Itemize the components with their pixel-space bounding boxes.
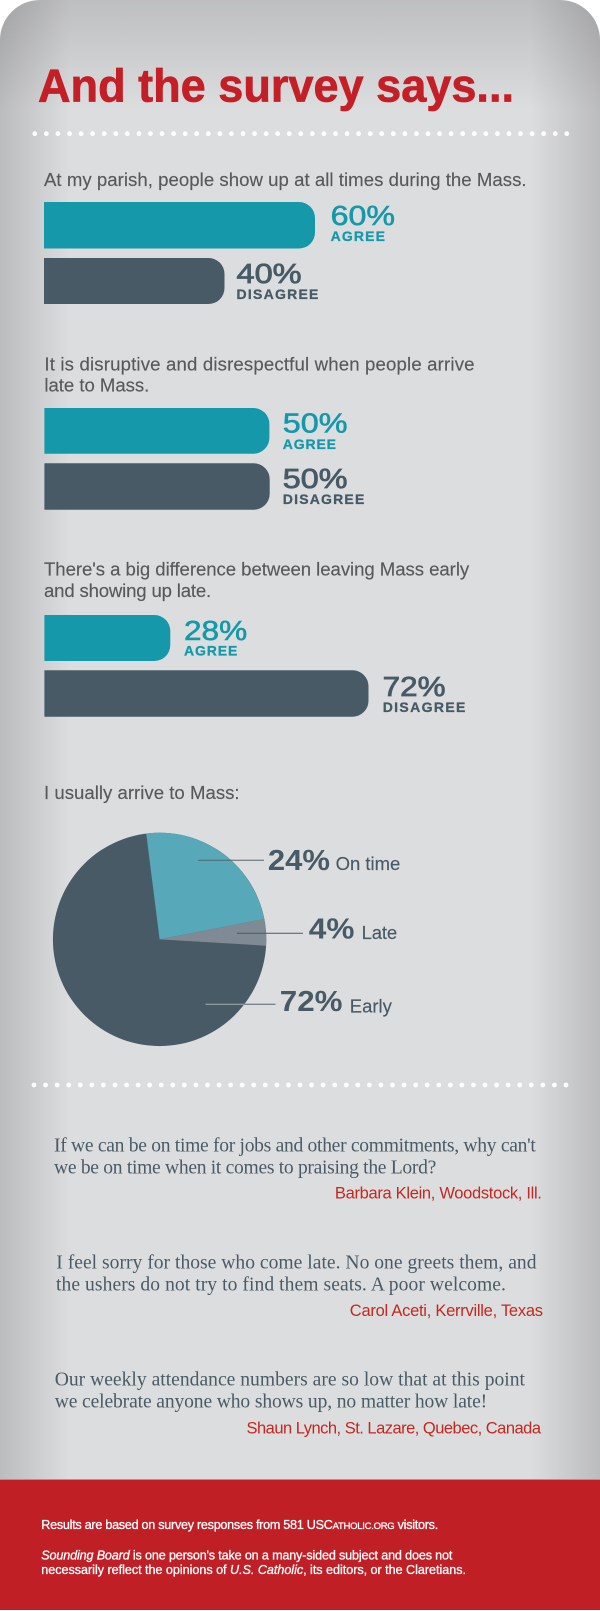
value: 72% disagree: 72% (383, 671, 446, 702)
disclaimer: Sounding Board is one person's take on a many-sided subject and does not (41, 1548, 453, 1562)
callout: 4% late: Late (362, 922, 397, 943)
value: 40% disagree (236, 258, 318, 302)
callout: 4% late: 4% (309, 914, 355, 946)
quote: Carol Aceti (56, 1252, 543, 1320)
quote: Carol Aceti: I feel sorry for those who come late. No one greets them, and (56, 1252, 537, 1273)
bar: disagree 72% (44, 670, 369, 717)
value: 50% agree: AGREE (283, 436, 336, 452)
title: And the survey says... (38, 60, 514, 112)
callout: 24% on time (198, 845, 400, 877)
question text: There's a big difference between leaving Mass early (44, 559, 470, 580)
value: 50% disagree: DISAGREE (283, 491, 364, 507)
survey note: Results are based on survey responses from 581 USCATHOLIC.ORG visitors. (41, 1518, 438, 1532)
value: 50% disagree (283, 463, 364, 507)
bar: agree 60% (44, 202, 315, 248)
callout: 24% on time: 24% (268, 845, 330, 877)
bar: disagree 40% (44, 258, 224, 304)
value: 50% agree (283, 408, 348, 452)
question text (44, 353, 475, 395)
quote: Barbara Klein: we be on time when it comes to praising the Lord? (54, 1157, 436, 1178)
question text: I usually arrive to Mass: (44, 782, 240, 803)
callout: 72% early: Early (350, 996, 393, 1017)
footer band (0, 1479, 600, 1610)
bar: agree 28% (44, 615, 170, 661)
quote: Shaun Lynch: Our weekly attendance numbers are so low that at this point (55, 1369, 526, 1390)
value: 28% agree: AGREE (184, 643, 237, 659)
quote: Barbara Klein: If we can be on time for jobs and other commitments, why can't (54, 1135, 536, 1156)
value: 60% agree: AGREE (331, 228, 385, 244)
quote: Shaun Lynch (55, 1369, 542, 1437)
value: 60% agree (331, 200, 395, 244)
panel: question 4 (44, 782, 400, 1046)
bar: agree 50% (44, 408, 269, 454)
panel: question 3 (44, 559, 470, 717)
quote: Barbara Klein: Barbara Klein, Woodstock, Ill. (335, 1185, 542, 1203)
disclaimer: necessarily reflect the opinions of U.S. Catholic, its editors, or the Claretians. (41, 1563, 466, 1577)
value: 60% agree: 60% (331, 200, 395, 231)
value: 72% disagree: DISAGREE (383, 699, 465, 715)
value: 50% disagree: 50% (283, 463, 348, 494)
panel: question 1 (44, 169, 527, 304)
pie chart (53, 833, 266, 1046)
quote: Barbara Klein (54, 1135, 542, 1203)
quote: Carol Aceti: the ushers do not try to find them seats. A poor welcome. (56, 1274, 506, 1295)
value: 28% agree (184, 615, 247, 659)
question text: It is disruptive and disrespectful when people arrive (44, 353, 475, 374)
disclaimer (41, 1548, 466, 1577)
question text: and showing up late. (44, 580, 211, 601)
bar: disagree 50% (44, 463, 270, 510)
callout: 4% late (237, 914, 397, 946)
panel: question 2 (44, 353, 475, 510)
value: 28% agree: 28% (184, 615, 247, 646)
callout: 24% on time: On time (336, 853, 400, 874)
quote: Shaun Lynch: Shaun Lynch, St. Lazare, Quebec, Canada (246, 1419, 542, 1437)
value: 72% disagree (383, 671, 465, 715)
quote: Shaun Lynch: we celebrate anyone who shows up, no matter how late! (55, 1391, 487, 1412)
question text: late to Mass. (44, 374, 149, 395)
quote: Carol Aceti: Carol Aceti, Kerrville, Texas (350, 1302, 543, 1320)
value: 40% disagree: DISAGREE (236, 286, 318, 302)
callout: 72% early (206, 986, 393, 1018)
value: 40% disagree: 40% (236, 258, 302, 289)
value: 50% agree: 50% (283, 408, 348, 439)
question text: At my parish, people show up at all times during the Mass. (44, 169, 527, 190)
callout: 72% early: 72% (280, 986, 343, 1018)
question text (44, 559, 470, 601)
